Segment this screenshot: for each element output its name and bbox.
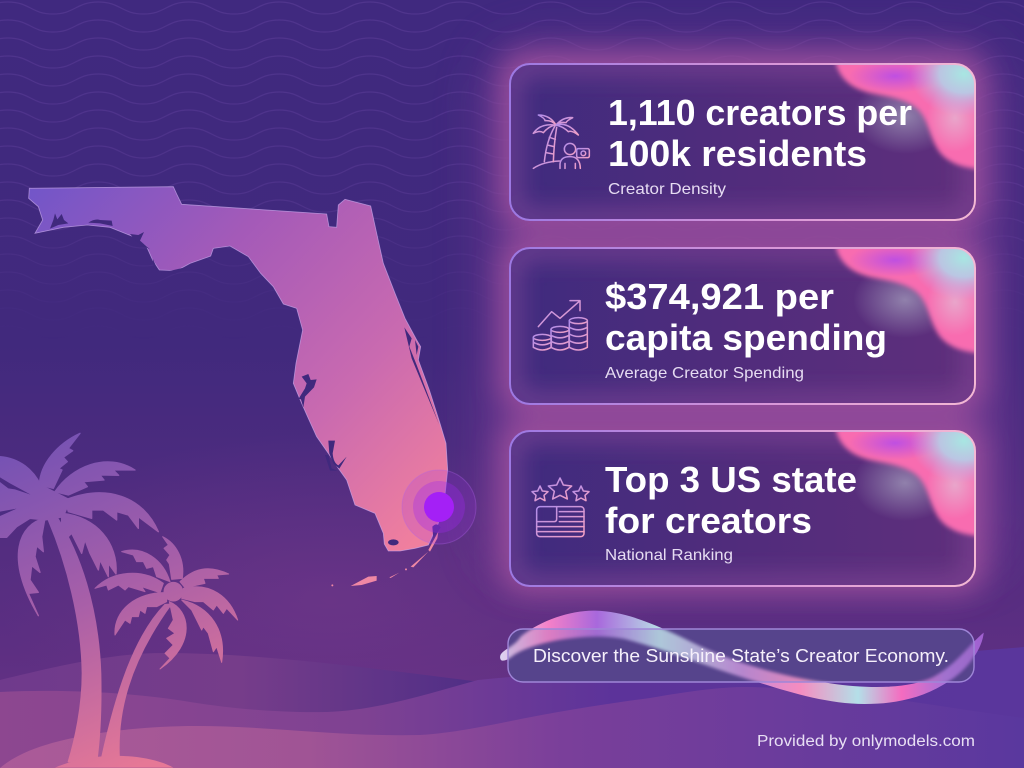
heading: 1,110 creators per [608, 92, 912, 133]
large palm [0, 433, 158, 762]
palm trees [0, 433, 238, 768]
card: national ranking [509, 430, 976, 587]
ribbon swoosh and tagline banner [500, 611, 984, 704]
location pin [402, 470, 476, 544]
label: National Ranking [605, 547, 733, 564]
florida keys [351, 532, 438, 586]
inlets and bays [50, 213, 441, 545]
tagline: Discover the Sunshine State’s Creator Economy. [533, 646, 949, 666]
hills [0, 647, 1024, 768]
card: creator spending: capita spending [605, 317, 887, 358]
label: Creator Density [608, 181, 726, 198]
icon: palm and creator [533, 115, 589, 168]
label: Average Creator Spending [605, 365, 804, 382]
florida map [29, 187, 448, 586]
heading: $374,921 per [605, 276, 834, 317]
icon: stars and flag [532, 478, 589, 537]
heading: Top 3 US state [605, 459, 857, 500]
island [55, 756, 173, 768]
card: national ranking: for creators [605, 500, 812, 541]
card: creator spending [509, 247, 976, 405]
credit line: Provided by onlymodels.com [757, 733, 975, 750]
icon: coins and arrow [533, 301, 587, 350]
card: creator density: 100k residents [608, 133, 867, 174]
small palm [95, 537, 238, 757]
card: creator density [509, 63, 976, 221]
